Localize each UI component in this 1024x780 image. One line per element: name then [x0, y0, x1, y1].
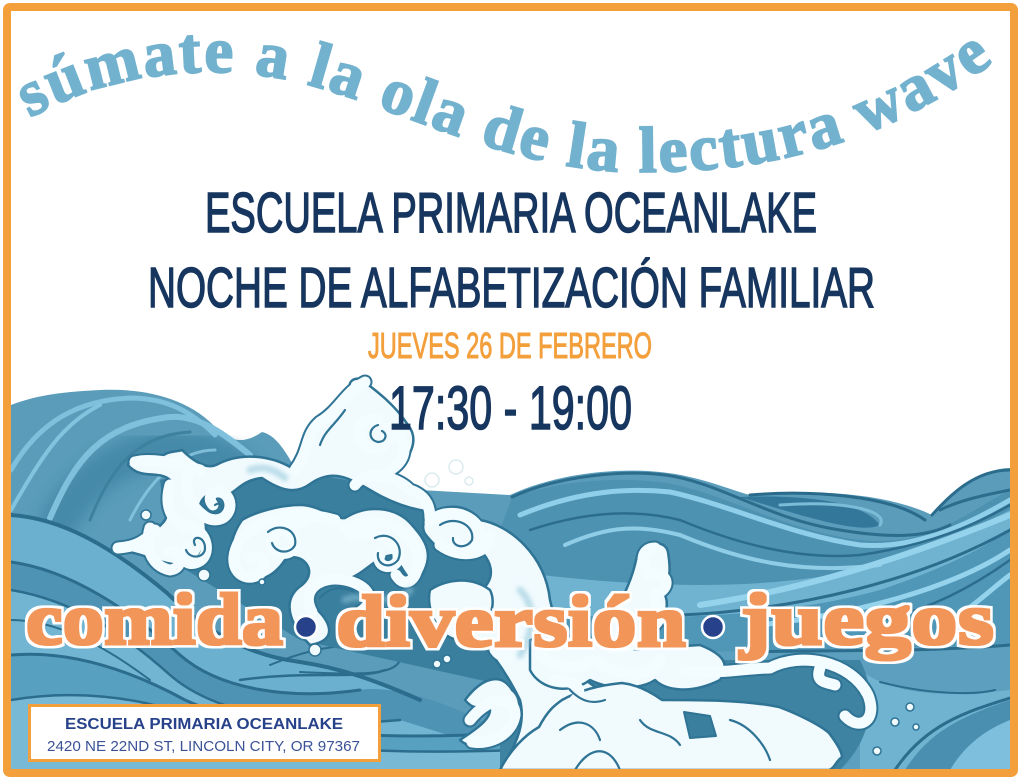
date: JUEVES 26 DE FEBRERO	[368, 325, 652, 366]
foam: centre curls	[231, 505, 670, 770]
words: comida	[26, 579, 283, 660]
foam curl outlines	[118, 382, 871, 743]
address: 2420 NE 22ND ST, LINCOLN CITY, OR 97367	[47, 738, 360, 755]
illustration: ocean waves	[11, 379, 1010, 770]
right wave bands	[502, 480, 1010, 585]
back wave body	[11, 390, 1010, 722]
faint spray bubbles	[425, 460, 473, 487]
dot 2	[702, 616, 724, 638]
foam: upper crest	[120, 379, 432, 565]
lower right water	[716, 646, 1010, 660]
foam: spirals and crest lines	[118, 382, 871, 770]
activities banner	[26, 579, 994, 662]
words: diversión	[336, 581, 686, 662]
school name: ESCUELA PRIMARIA OCEANLAKE	[65, 716, 343, 733]
left wave shading	[11, 398, 250, 520]
dot 1	[295, 616, 317, 638]
words	[26, 579, 994, 662]
words: juegos	[739, 579, 994, 660]
time: 17:30 - 19:00	[389, 374, 632, 442]
address box	[30, 706, 380, 760]
left swell bands	[11, 517, 392, 692]
foam: lower crest	[460, 636, 842, 770]
curved heading: súmate a la ola de la lectura wave	[20, 35, 992, 173]
bubbles	[141, 510, 919, 755]
center dark water behind foam	[160, 477, 500, 681]
